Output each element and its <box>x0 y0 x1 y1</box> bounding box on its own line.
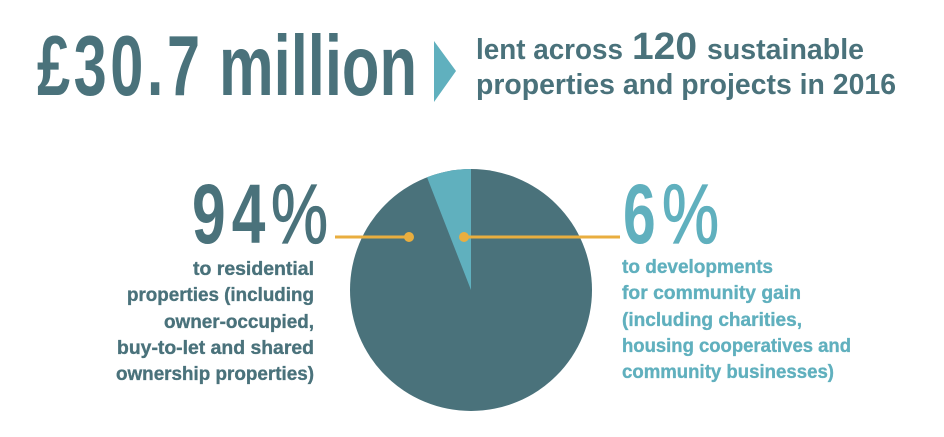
description: residential properties: to residential <box>193 258 314 280</box>
subtitle: lending summary: lent across <box>476 34 623 66</box>
stat: 6 percent: % <box>662 167 719 261</box>
description: community developments: community businesses) <box>622 361 834 383</box>
arrow: header pointer <box>434 41 456 102</box>
leader line: residential <box>335 232 414 242</box>
subtitle: lending summary: sustainable <box>707 34 864 66</box>
description: residential properties <box>116 258 314 385</box>
title: amount lent: million <box>219 19 417 114</box>
description: community developments: housing cooperatives and <box>622 335 851 357</box>
stat: 6 percent: 6 <box>623 168 656 262</box>
stat: 94 percent: % <box>271 167 328 261</box>
title: amount lent: £30.7 <box>37 19 200 114</box>
subtitle: lending summary: 120 <box>632 26 697 68</box>
pie slice: residential 94% <box>350 169 592 411</box>
stat: 94 percent: 94 <box>192 167 266 261</box>
description: residential properties: buy-to-let and shared <box>117 337 314 359</box>
stat: 6 percent <box>623 167 719 262</box>
description: community developments: to developments <box>622 256 773 278</box>
stat: 94 percent <box>192 167 328 261</box>
description: residential properties: properties (including <box>127 284 314 306</box>
description: community developments <box>622 256 851 383</box>
subtitle: lending summary <box>476 26 896 101</box>
leader line: community gain <box>459 232 620 242</box>
description: residential properties: owner-occupied, <box>164 311 314 333</box>
description: community developments: (including charities, <box>622 309 802 331</box>
title: amount lent <box>37 19 417 114</box>
pie chart: share of lending <box>350 169 592 411</box>
pie slice: community gain 6% <box>427 169 471 290</box>
description: residential properties: ownership properties) <box>116 363 314 385</box>
description: community developments: for community gain <box>622 282 801 304</box>
subtitle: lending summary: properties and projects in 2016 <box>476 69 896 101</box>
